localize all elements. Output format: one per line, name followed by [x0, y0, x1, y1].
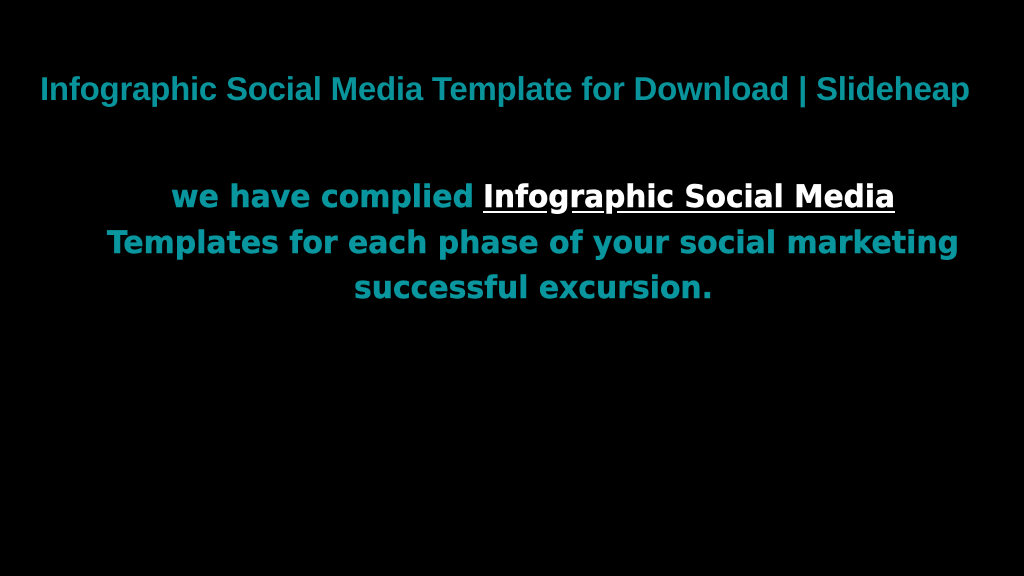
link: Infographic Social Media: Infographic Social Media: [483, 179, 895, 215]
line 3 teal text: successful excursion.: [354, 270, 713, 306]
text block: description: [107, 179, 959, 306]
title: Infographic Social Media Template for Download | Slideheap: [40, 70, 970, 108]
line 1 teal text: we have complied: [171, 179, 474, 215]
line 2 teal text: Templates for each phase of your social marketing: [107, 225, 959, 261]
